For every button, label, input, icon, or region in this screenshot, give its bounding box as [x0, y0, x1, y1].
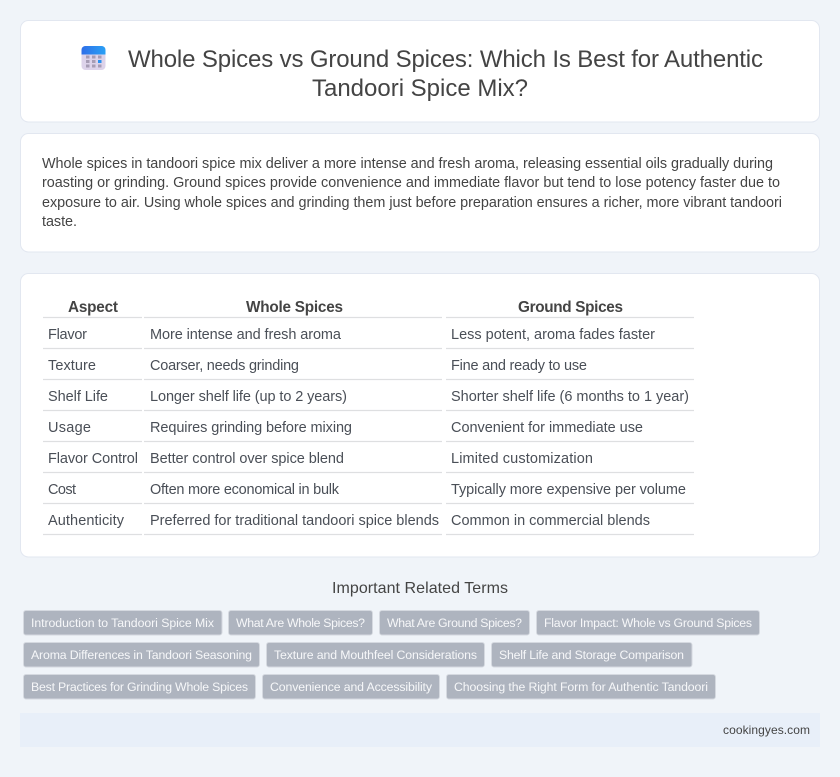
row: cost: Typically more expensive per volume — [451, 482, 686, 498]
panel: summary paragraph — [20, 134, 820, 252]
panel: comparison table — [20, 274, 820, 557]
row: shelf life — [48, 389, 689, 405]
row: cost: Cost — [48, 482, 76, 498]
footer credit: cookingyes.com — [723, 723, 810, 737]
row: cost — [48, 482, 686, 498]
row: authenticity: Authenticity — [48, 513, 125, 529]
text block: summary: taste. — [42, 214, 77, 230]
table header — [68, 299, 623, 316]
tag: Shelf Life and Storage Comparison — [499, 648, 684, 662]
row: shelf life: Shorter shelf life (6 months to 1 year) — [451, 389, 689, 405]
related term tags — [24, 610, 760, 699]
tag — [380, 610, 530, 635]
row: cost: Often more economical in bulk — [150, 482, 340, 498]
row: usage: Convenient for immediate use — [451, 420, 643, 436]
tag: Introduction to Tandoori Spice Mix — [31, 616, 215, 630]
row: authenticity: Common in commercial blends — [451, 513, 650, 529]
row: flavor control — [48, 451, 593, 467]
title: Tandoori Spice Mix? — [312, 75, 528, 102]
text block: summary: roasting or grinding. Ground spices provide convenience and immediate flavor but tend to lose potency faster due to — [42, 175, 780, 191]
row: usage: Usage — [48, 420, 91, 436]
row: flavor control: Flavor Control — [48, 451, 138, 467]
text block: summary: Whole spices in tandoori spice mix deliver a more intense and fresh aroma, releasing essential oils gradually during — [42, 156, 773, 172]
tag: Best Practices for Grinding Whole Spices — [31, 680, 248, 694]
row: texture: Texture — [48, 358, 96, 374]
row: shelf life: Longer shelf life (up to 2 years) — [150, 389, 347, 405]
tag: Convenience and Accessibility — [270, 680, 433, 694]
tag — [446, 674, 716, 699]
tag: What Are Whole Spices? — [236, 616, 365, 630]
row: usage — [48, 420, 643, 436]
table header: Aspect — [68, 299, 118, 316]
row: authenticity — [48, 513, 650, 529]
tag — [492, 642, 692, 667]
tag — [24, 642, 260, 667]
tag — [536, 610, 760, 635]
footer — [20, 713, 820, 747]
title — [128, 46, 763, 102]
row: texture: Coarser, needs grinding — [150, 358, 299, 374]
row: authenticity: Preferred for traditional tandoori spice blends — [150, 513, 439, 529]
heading: related terms: Important Related Terms — [332, 580, 508, 597]
tag: Choosing the Right Form for Authentic Tandoori — [454, 680, 708, 694]
tag — [24, 610, 222, 635]
tag — [228, 610, 372, 635]
text block: summary: exposure to air. Using whole spices and grinding them just before preparation ensures a richer, more vibrant tandoori — [42, 195, 782, 211]
tag: Flavor Impact: Whole vs Ground Spices — [544, 616, 752, 630]
table header: Whole Spices — [246, 299, 343, 316]
row: flavor: Less potent, aroma fades faster — [451, 327, 655, 343]
row: shelf life: Shelf Life — [48, 389, 108, 405]
tag — [24, 674, 256, 699]
row: flavor control: Limited customization — [451, 451, 593, 467]
tag: What Are Ground Spices? — [387, 616, 522, 630]
row: texture: Fine and ready to use — [451, 358, 587, 374]
row: flavor: Flavor — [48, 327, 87, 343]
table header: Ground Spices — [518, 299, 623, 316]
row: flavor — [48, 327, 655, 343]
text block: summary — [42, 156, 782, 230]
row: usage: Requires grinding before mixing — [150, 420, 352, 436]
icon: calendar — [82, 46, 106, 70]
row: texture — [48, 358, 587, 374]
tag — [266, 642, 484, 667]
title: Whole Spices vs Ground Spices: Which Is Best for Authentic — [128, 46, 763, 73]
row: flavor control: Better control over spice blend — [150, 451, 344, 467]
header panel — [20, 20, 820, 122]
tag — [262, 674, 440, 699]
tag: Aroma Differences in Tandoori Seasoning — [31, 648, 252, 662]
tag: Texture and Mouthfeel Considerations — [274, 648, 477, 662]
row: flavor: More intense and fresh aroma — [150, 327, 342, 343]
